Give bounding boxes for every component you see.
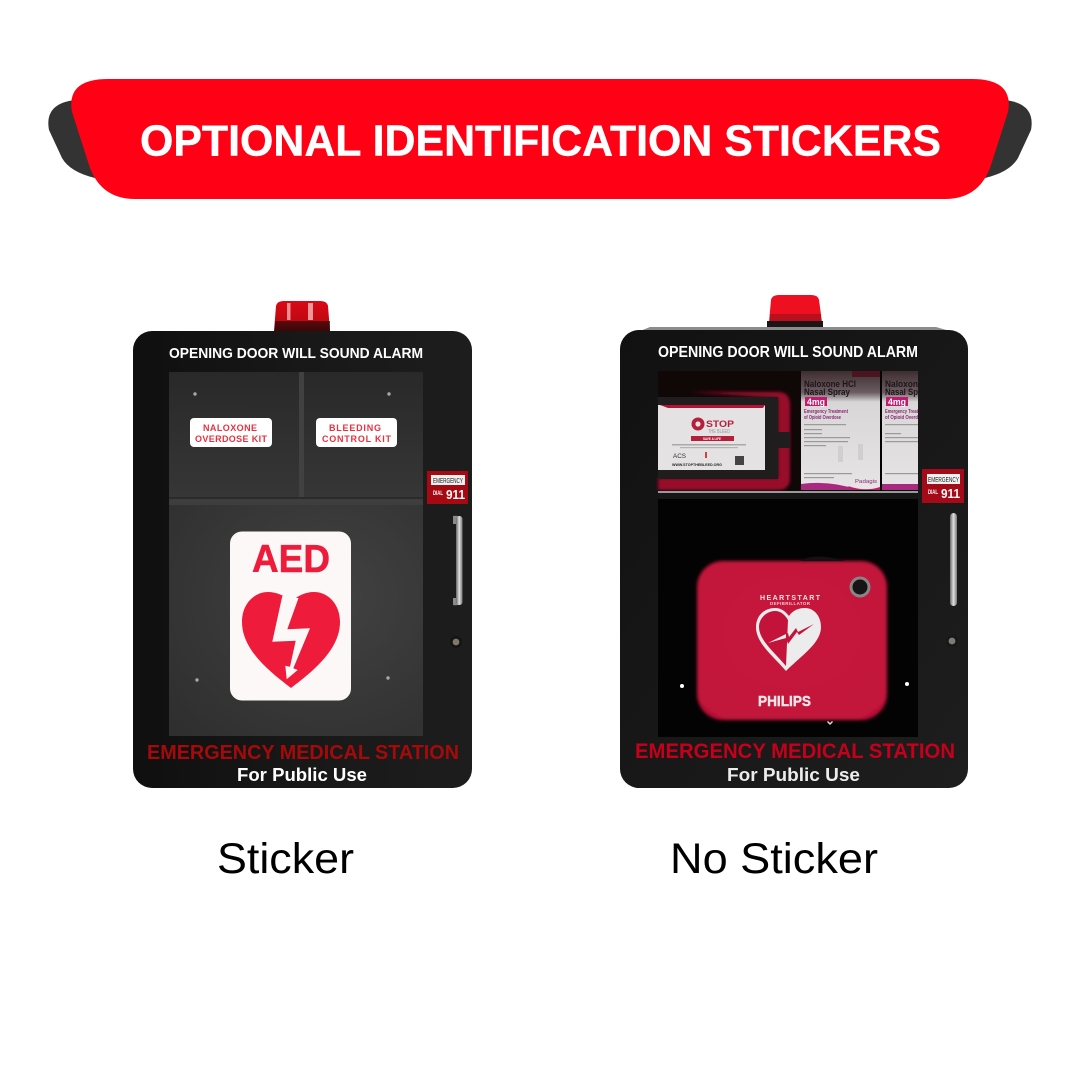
naloxone box one: Naloxone HCl: [804, 379, 856, 390]
alarm warning text: OPENING DOOR WILL SOUND ALARM: [169, 345, 423, 362]
naloxone box one: of Opioid Overdose: [804, 415, 841, 421]
stop the bleed card: ACS: [673, 454, 686, 460]
cabinet window: [169, 372, 423, 736]
emergency dial 911 sticker: [427, 471, 468, 504]
window mounting dots: [680, 682, 909, 725]
alarm warning text: OPENING DOOR WILL SOUND ALARM: [658, 344, 918, 361]
cabinet with stickers: [133, 301, 472, 788]
naloxone box two: Nasal Sp: [885, 387, 918, 398]
for public use text: For Public Use: [727, 764, 860, 785]
naloxone box two: of Opioid Overd: [885, 415, 918, 421]
stop the bleed card: THE BLEED: [708, 429, 730, 435]
heart with lightning bolt: [242, 592, 340, 688]
emergency dial 911 sticker: EMERGENCY: [433, 478, 463, 485]
bleeding control kit sticker: CONTROL KIT: [322, 434, 392, 444]
naloxone box one: [801, 371, 880, 490]
heartstart heart logo: [756, 608, 821, 671]
emergency dial 911 sticker: 911: [446, 487, 465, 502]
cabinet window: [658, 371, 918, 737]
emergency medical station text: EMERGENCY MEDICAL STATION: [147, 741, 459, 764]
caption: sticker: Sticker: [217, 835, 354, 883]
emergency medical station text: EMERGENCY MEDICAL STATION: [635, 740, 955, 763]
naloxone box one: Emergency Treatment: [804, 409, 848, 415]
naloxone box two: [882, 371, 918, 490]
stop the bleed card: STOP: [706, 419, 734, 429]
bleeding control pouch: [658, 371, 801, 491]
emergency dial 911 sticker: DIAL: [928, 490, 938, 496]
philips wordmark: PHILIPS: [758, 694, 811, 710]
cabinet body: [133, 331, 472, 788]
naloxone box one: 4mg: [807, 397, 825, 407]
shelf shadow: [658, 493, 918, 499]
cabinet top edge: [640, 327, 950, 331]
bleeding control kit sticker: [316, 418, 397, 447]
banner right dark tab: [985, 100, 1032, 178]
beacon light: [767, 295, 823, 329]
AED sign: AED: [252, 538, 330, 581]
door lock: [450, 636, 462, 648]
stop the bleed card: [658, 405, 765, 470]
door lock: [946, 635, 958, 647]
naloxone box two: 4mg: [888, 397, 906, 407]
bleeding control kit sticker: BLEEDING: [329, 423, 381, 433]
banner left dark tab: [48, 100, 95, 178]
case strap handle: [800, 556, 845, 561]
naloxone box one: Nasal Spray: [804, 387, 851, 398]
naloxone overdose kit sticker: [190, 418, 272, 447]
title banner: [48, 79, 1032, 199]
door handle: [950, 513, 957, 606]
stop the bleed card: SAVE A LIFE: [703, 436, 721, 441]
naloxone box two: Emergency Treat: [885, 409, 918, 415]
banner red shape: [71, 79, 1009, 199]
defibrillator label: DEFIBRILLATOR: [770, 601, 811, 606]
for public use text: For Public Use: [237, 765, 367, 785]
heartstart label: HEARTSTART: [760, 595, 821, 602]
case grommet: [850, 576, 870, 598]
beacon light: [274, 301, 330, 331]
emergency dial 911 sticker: EMERGENCY: [928, 477, 959, 484]
cabinet body: [620, 330, 968, 788]
emergency dial 911 sticker: [922, 469, 964, 503]
emergency dial 911 sticker: 911: [941, 486, 960, 501]
caption: no sticker: No Sticker: [670, 835, 878, 883]
AED sign: [230, 532, 351, 700]
door handle: [453, 516, 462, 605]
naloxone overdose kit sticker: OVERDOSE KIT: [195, 434, 268, 444]
emergency dial 911 sticker: DIAL: [433, 491, 443, 497]
shelf: [658, 491, 918, 493]
cabinet without stickers: [620, 295, 968, 788]
banner heading: OPTIONAL IDENTIFICATION STICKERS: [140, 116, 941, 166]
stop the bleed card: WWW.STOPTHEBLEED.ORG: [672, 462, 722, 467]
naloxone box one: Padagis: [855, 479, 878, 485]
naloxone box two: Naloxon: [885, 379, 918, 390]
naloxone overdose kit sticker: NALOXONE: [203, 423, 257, 433]
philips defibrillator case: [697, 556, 887, 720]
